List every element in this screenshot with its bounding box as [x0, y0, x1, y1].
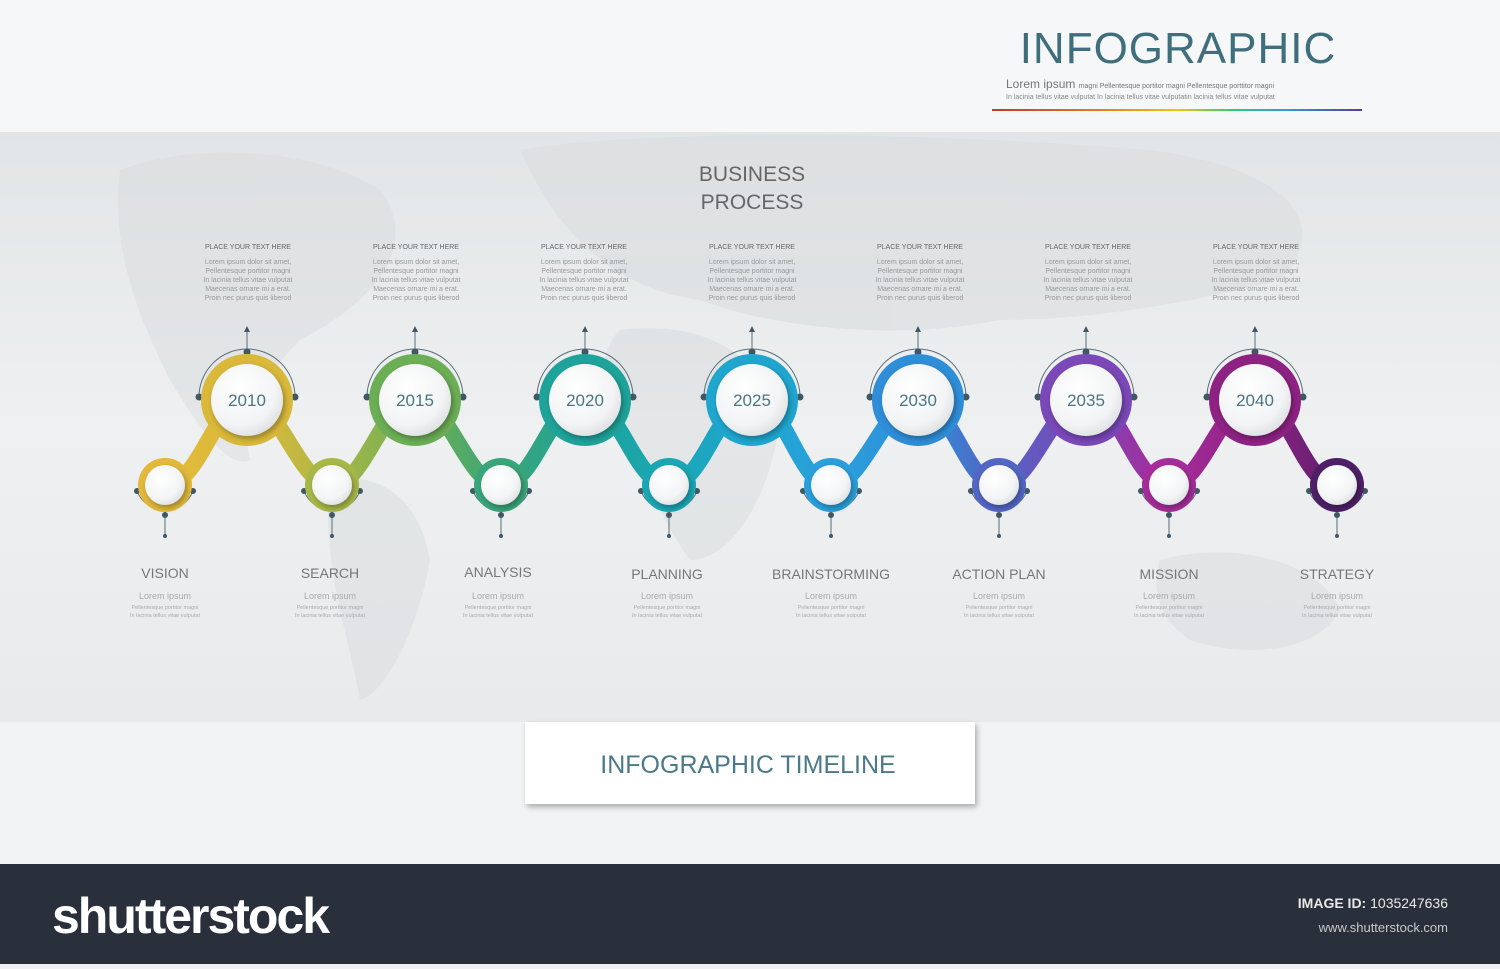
text blocks above top nodes: Proin nec purus quis liberod — [709, 295, 795, 302]
step labels: In lacinia tellus vitae vulputat — [130, 613, 200, 619]
step labels: VISION — [141, 565, 189, 581]
text blocks above top nodes: PLACE YOUR TEXT HERE — [1213, 244, 1299, 251]
step labels: In lacinia tellus vitae vulputat — [463, 613, 533, 619]
title: INFOGRAPHIC: Lorem ipsum magni Pellentesque portitor magni Pellentesque porttitor magni — [1006, 77, 1274, 91]
title: INFOGRAPHIC: In lacinia tellus vitae vulputat In lacinia tellus vitae vulputatin lacinia tellus vitae vulputat — [1006, 94, 1275, 101]
step labels: ACTION PLAN — [952, 566, 1046, 582]
top year nodes: 2030 — [899, 391, 937, 410]
text blocks above top nodes: Pellentesque portitor magni — [877, 268, 963, 275]
step labels: Pellentesque portitor magni — [634, 605, 700, 611]
step labels: Pellentesque portitor magni — [966, 605, 1032, 611]
step labels: In lacinia tellus vitae vulputat — [796, 613, 866, 619]
text blocks above top nodes: PLACE YOUR TEXT HERE — [1045, 244, 1131, 251]
bottom band — [0, 722, 1500, 864]
step labels: Pellentesque portitor magni — [1304, 605, 1370, 611]
text blocks above top nodes: Maecenas ornare mi a erat. — [1045, 286, 1131, 293]
text blocks above top nodes: PLACE YOUR TEXT HERE — [373, 244, 459, 251]
step labels: In lacinia tellus vitae vulputat — [1302, 613, 1372, 619]
text blocks above top nodes: PLACE YOUR TEXT HERE — [205, 244, 291, 251]
text blocks above top nodes: In lacinia tellus vitae vulputat — [371, 277, 461, 284]
text blocks above top nodes: Pellentesque portitor magni — [709, 268, 795, 275]
banner: infographic timeline: INFOGRAPHIC TIMELINE — [600, 751, 896, 779]
step labels — [130, 564, 1375, 619]
text blocks above top nodes: PLACE YOUR TEXT HERE — [541, 244, 627, 251]
top node indicators (arcs, dots, arrows) — [137, 330, 1365, 535]
text blocks above top nodes: Pellentesque portitor magni — [1213, 268, 1299, 275]
text blocks above top nodes: In lacinia tellus vitae vulputat — [707, 277, 797, 284]
step labels: PLANNING — [631, 566, 703, 582]
step labels: Lorem ipsum — [973, 591, 1025, 601]
footer: www.shutterstock.com — [1318, 920, 1448, 935]
text blocks above top nodes: Pellentesque portitor magni — [205, 268, 291, 275]
text blocks above top nodes: Lorem ipsum dolor sit amet, — [373, 259, 459, 266]
top year nodes: 2010 — [228, 391, 266, 410]
text blocks above top nodes: Maecenas ornare mi a erat. — [877, 286, 963, 293]
top year nodes: 2015 — [396, 391, 434, 410]
step labels: Pellentesque portitor magni — [1136, 605, 1202, 611]
footer: shutterstock — [52, 888, 330, 944]
step labels: BRAINSTORMING — [772, 566, 890, 582]
heading: business process — [699, 163, 805, 214]
banner: infographic timeline — [525, 722, 975, 804]
text blocks above top nodes: Proin nec purus quis liberod — [205, 295, 291, 302]
text blocks above top nodes: Lorem ipsum dolor sit amet, — [1045, 259, 1131, 266]
text blocks above top nodes: Pellentesque portitor magni — [1045, 268, 1131, 275]
heading: business process: BUSINESS — [699, 163, 805, 186]
heading: business process: PROCESS — [701, 191, 803, 214]
step labels: Lorem ipsum — [472, 591, 524, 601]
text blocks above top nodes: In lacinia tellus vitae vulputat — [539, 277, 629, 284]
step labels: Lorem ipsum — [641, 591, 693, 601]
text blocks above top nodes: Lorem ipsum dolor sit amet, — [709, 259, 795, 266]
text blocks above top nodes: Lorem ipsum dolor sit amet, — [1213, 259, 1299, 266]
step labels: Lorem ipsum — [139, 591, 191, 601]
top year nodes — [201, 354, 1301, 446]
text blocks above top nodes — [203, 244, 1301, 302]
step labels: Lorem ipsum — [1143, 591, 1195, 601]
title: INFOGRAPHIC — [992, 24, 1362, 111]
top year nodes: 2035 — [1067, 391, 1105, 410]
text blocks above top nodes: In lacinia tellus vitae vulputat — [875, 277, 965, 284]
text blocks above top nodes: In lacinia tellus vitae vulputat — [1043, 277, 1133, 284]
text blocks above top nodes: Lorem ipsum dolor sit amet, — [541, 259, 627, 266]
step labels: In lacinia tellus vitae vulputat — [295, 613, 365, 619]
text blocks above top nodes: Pellentesque portitor magni — [373, 268, 459, 275]
step labels: Lorem ipsum — [1311, 591, 1363, 601]
step labels: Lorem ipsum — [805, 591, 857, 601]
step labels: SEARCH — [301, 565, 359, 581]
text blocks above top nodes: Maecenas ornare mi a erat. — [1213, 286, 1299, 293]
step labels: In lacinia tellus vitae vulputat — [632, 613, 702, 619]
text blocks above top nodes: In lacinia tellus vitae vulputat — [1211, 277, 1301, 284]
text blocks above top nodes: Lorem ipsum dolor sit amet, — [205, 259, 291, 266]
bottom nodes — [138, 458, 1364, 512]
text blocks above top nodes: Proin nec purus quis liberod — [541, 295, 627, 302]
text blocks above top nodes: PLACE YOUR TEXT HERE — [709, 244, 795, 251]
text blocks above top nodes: Maecenas ornare mi a erat. — [205, 286, 291, 293]
step labels: MISSION — [1139, 566, 1199, 582]
text blocks above top nodes: Proin nec purus quis liberod — [1045, 295, 1131, 302]
text blocks above top nodes: In lacinia tellus vitae vulputat — [203, 277, 293, 284]
title: INFOGRAPHIC: INFOGRAPHIC — [1020, 24, 1336, 73]
text blocks above top nodes: Maecenas ornare mi a erat. — [373, 286, 459, 293]
text blocks above top nodes: Proin nec purus quis liberod — [1213, 295, 1299, 302]
step labels: ANALYSIS — [464, 564, 532, 580]
step labels: Pellentesque portitor magni — [798, 605, 864, 611]
text blocks above top nodes: Proin nec purus quis liberod — [373, 295, 459, 302]
step labels: Lorem ipsum — [304, 591, 356, 601]
step labels: Pellentesque portitor magni — [132, 605, 198, 611]
text blocks above top nodes: Proin nec purus quis liberod — [877, 295, 963, 302]
footer: IMAGE ID: 1035247636 — [1298, 895, 1448, 911]
timeline wave connector — [165, 400, 1337, 485]
middle panel background — [0, 132, 1500, 722]
top band — [0, 0, 1500, 132]
text blocks above top nodes: Maecenas ornare mi a erat. — [709, 286, 795, 293]
text blocks above top nodes: Lorem ipsum dolor sit amet, — [877, 259, 963, 266]
step labels: Pellentesque portitor magni — [465, 605, 531, 611]
step labels: In lacinia tellus vitae vulputat — [964, 613, 1034, 619]
world map silhouette — [118, 135, 1340, 700]
top year nodes: 2025 — [733, 391, 771, 410]
text blocks above top nodes: PLACE YOUR TEXT HERE — [877, 244, 963, 251]
step labels: Pellentesque portitor magni — [297, 605, 363, 611]
top year nodes: 2040 — [1236, 391, 1274, 410]
step labels: In lacinia tellus vitae vulputat — [1134, 613, 1204, 619]
step labels: STRATEGY — [1300, 566, 1375, 582]
text blocks above top nodes: Maecenas ornare mi a erat. — [541, 286, 627, 293]
text blocks above top nodes: Pellentesque portitor magni — [541, 268, 627, 275]
top year nodes: 2020 — [566, 391, 604, 410]
footer — [0, 864, 1500, 964]
